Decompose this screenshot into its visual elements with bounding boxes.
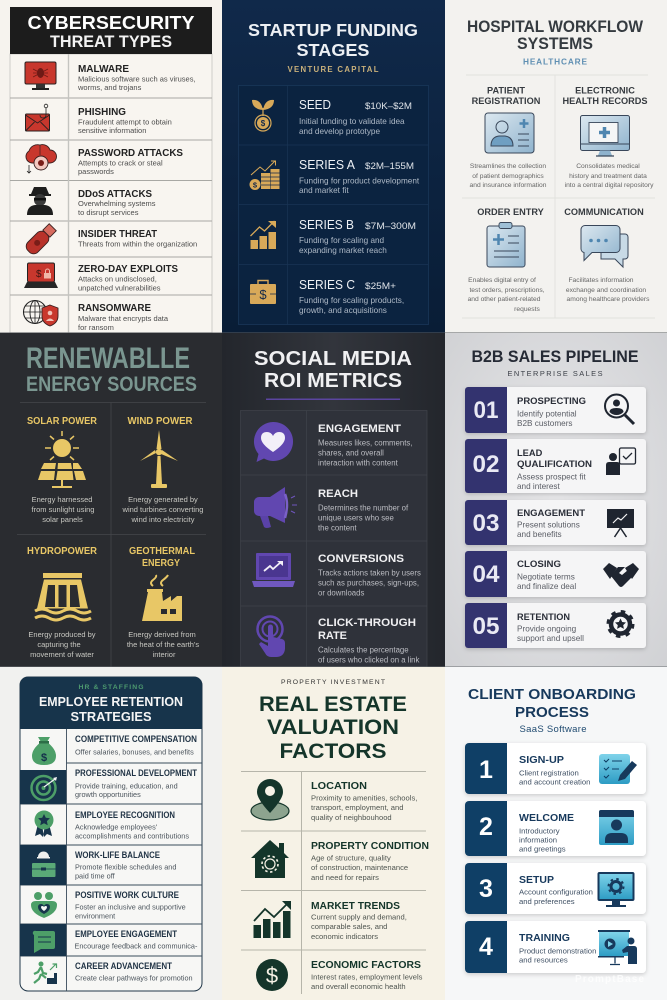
icon: map pin bbox=[251, 779, 289, 820]
row: location: transport, employment, and bbox=[311, 803, 403, 812]
row: malware: MALWARE bbox=[78, 64, 129, 75]
icon: person with checkbox bbox=[606, 448, 636, 475]
card: welcome: information bbox=[519, 836, 557, 844]
row: seed: and develop prototype bbox=[299, 127, 380, 136]
icon: message bubble bbox=[33, 931, 55, 953]
card: retention: support and upsell bbox=[517, 634, 584, 643]
icon: chat bubbles bbox=[581, 226, 628, 267]
icon: coins and arrow: $ bbox=[253, 180, 258, 190]
row: phishing bbox=[26, 104, 172, 135]
cell: electronic health records: ELECTRONIC bbox=[575, 86, 635, 96]
icon: sun and solar panel bbox=[38, 431, 86, 488]
row: employee engagement: EMPLOYEE ENGAGEMENT bbox=[75, 929, 178, 939]
card: setup bbox=[465, 863, 646, 914]
row: click-through rate bbox=[258, 616, 420, 664]
row: employee engagement bbox=[20, 924, 198, 956]
row: zero-day exploits bbox=[24, 263, 178, 292]
row: competitive compensation bbox=[32, 734, 197, 765]
row: engagement: shares, and overall bbox=[318, 448, 384, 458]
card: engagement: 03 bbox=[472, 510, 500, 537]
panel: client onboarding process bbox=[445, 667, 667, 1000]
card: retention bbox=[465, 603, 646, 648]
row: property condition bbox=[251, 840, 429, 882]
card: sign-up: Client registration bbox=[519, 768, 579, 778]
heading: renewable energy sources: RENEWABLLE bbox=[26, 342, 190, 375]
heading: hospital workflow systems: SYSTEMS bbox=[517, 35, 593, 53]
cell: patient registration: of patient demographics bbox=[472, 173, 544, 180]
row: employee recognition bbox=[34, 810, 189, 840]
row: positive work culture: POSITIVE WORK CULTURE bbox=[75, 890, 179, 900]
cell: solar power: Energy harnessed bbox=[32, 495, 92, 504]
row: series a: Funding for product development bbox=[299, 176, 420, 186]
card: sign-up: SIGN-UP bbox=[519, 755, 564, 766]
icon: handshake bbox=[603, 563, 639, 587]
row: engagement: interaction with content bbox=[318, 458, 399, 468]
row: market trends: economic indicators bbox=[311, 932, 378, 941]
row: series c: growth, and acquisitions bbox=[299, 306, 387, 315]
cell: solar power: from sunlight using bbox=[32, 505, 94, 514]
icon: money bag bbox=[32, 737, 56, 765]
row: reach: Determines the number of bbox=[318, 504, 409, 512]
icon: id card bbox=[485, 113, 534, 153]
cell: patient registration: and insurance information bbox=[470, 182, 547, 189]
panel: renewable energy sources bbox=[0, 333, 222, 667]
heading: renewable energy sources: ENERGY SOURCES bbox=[26, 373, 197, 396]
row: malware: Malicious software such as viruses, bbox=[78, 74, 196, 84]
heading: cybersecurity: THREAT TYPES bbox=[50, 33, 172, 51]
cell: hydropower: capturing the bbox=[37, 640, 81, 649]
icon: sprout coin: $ bbox=[261, 119, 266, 128]
row: malware: worms, and trojans bbox=[77, 83, 142, 92]
row: positive work culture: Foster an inclusive and supportive bbox=[75, 902, 186, 912]
row: series c bbox=[250, 278, 404, 315]
row: economic factors: ECONOMIC FACTORS bbox=[311, 960, 421, 971]
row: series c: $25M+ bbox=[365, 281, 396, 292]
icon: hooked envelope bbox=[26, 104, 50, 131]
row: click-through rate: CLICK-THROUGH bbox=[318, 617, 416, 629]
row: employee recognition: EMPLOYEE RECOGNITION bbox=[75, 810, 175, 820]
heading: b2b sales pipeline: ENTERPRISE SALES bbox=[508, 369, 603, 378]
icon: usb drive bbox=[24, 222, 58, 256]
icon: target with dart bbox=[32, 776, 57, 800]
row: series b: expanding market reach bbox=[299, 246, 387, 255]
icon: sprout coin bbox=[252, 100, 274, 131]
row: malware bbox=[25, 62, 196, 92]
row: economic factors: Interest rates, employment levels bbox=[311, 972, 423, 982]
cell: order entry: ORDER ENTRY bbox=[477, 207, 544, 217]
cell: solar power: SOLAR POWER bbox=[27, 416, 98, 427]
row: work-life balance: Promote flexible schedules and bbox=[75, 862, 176, 872]
heading: client onboarding process: CLIENT ONBOARDING bbox=[468, 686, 636, 703]
cell: communication: among healthcare providers bbox=[567, 296, 650, 303]
icon: megaphone bbox=[254, 487, 297, 528]
card: retention: Provide ongoing bbox=[517, 624, 577, 634]
row: series b bbox=[250, 218, 416, 255]
card: prospecting bbox=[465, 387, 646, 433]
heading: startup funding stages bbox=[248, 20, 418, 74]
cell: hydropower: HYDROPOWER bbox=[27, 546, 98, 557]
heading: employee retention strategies: STRATEGIES bbox=[70, 709, 152, 724]
panel: social media roi metrics bbox=[222, 333, 445, 667]
cell: order entry: requests bbox=[514, 306, 540, 313]
row: click-through rate: Calculates the percentage bbox=[318, 646, 409, 654]
panel: hospital workflow systems bbox=[445, 0, 667, 333]
row: password attacks: passwords bbox=[78, 167, 114, 176]
row: series b: SERIES B bbox=[299, 218, 354, 232]
row: employee recognition: Acknowledge employees' bbox=[75, 822, 158, 832]
panel: employee retention strategies bbox=[0, 667, 222, 1000]
icon: laptop trend bbox=[252, 553, 295, 587]
heading: cybersecurity: CYBERSECURITY bbox=[28, 12, 195, 33]
row: password attacks: PASSWORD ATTACKS bbox=[78, 148, 183, 159]
cell: geothermal energy: GEOTHERMAL bbox=[129, 546, 195, 557]
row: property condition: PROPERTY CONDITION bbox=[311, 841, 429, 852]
icon: growth bars bbox=[250, 221, 276, 249]
heading: real estate valuation factors: PROPERTY INVESTMENT bbox=[281, 679, 385, 686]
icon: laptop with lock: $ bbox=[36, 269, 42, 280]
icon: clipboard bbox=[487, 222, 525, 267]
cell: patient registration: REGISTRATION bbox=[472, 96, 541, 106]
row: career advancement bbox=[34, 961, 193, 984]
row: conversions: Tracks actions taken by users bbox=[318, 568, 421, 578]
cell: order entry: and other patient-related bbox=[468, 296, 541, 303]
row: series a: SERIES A bbox=[299, 158, 356, 172]
row: engagement: ENGAGEMENT bbox=[318, 423, 401, 435]
row: series b: Funding for scaling and bbox=[299, 236, 385, 245]
cell: communication: Facilitates information bbox=[568, 277, 634, 284]
card: prospecting: Identify potential bbox=[517, 410, 577, 418]
cell: hydropower bbox=[27, 546, 98, 659]
row: zero-day exploits: ZERO-DAY EXPLOITS bbox=[78, 264, 178, 275]
card: lead qualification: QUALIFICATION bbox=[517, 459, 592, 469]
cell: communication: exchange and coordination bbox=[566, 287, 646, 294]
cell: order entry bbox=[468, 207, 545, 313]
card: lead qualification: LEAD bbox=[517, 448, 543, 458]
icon: tapping hand bbox=[258, 616, 285, 657]
card: welcome: Introductory bbox=[519, 826, 560, 836]
row: series c: SERIES C bbox=[299, 278, 355, 292]
row: property condition: of construction, maintenance bbox=[311, 863, 408, 872]
card: lead qualification: Assess prospect fit bbox=[517, 472, 586, 482]
card: setup: Account configuration bbox=[519, 888, 593, 896]
heading: b2b sales pipeline: B2B SALES PIPELINE bbox=[472, 347, 638, 366]
row: ddos attacks: to disrupt services bbox=[78, 208, 139, 217]
row: zero-day exploits: unpatched vulnerabilities bbox=[78, 284, 161, 292]
card: setup: SETUP bbox=[519, 875, 554, 886]
row: market trends: Current supply and demand, bbox=[311, 912, 407, 922]
heading: client onboarding process bbox=[468, 686, 636, 735]
row: employee engagement: Encourage feedback and communica- bbox=[74, 942, 198, 950]
cell: patient registration bbox=[470, 86, 547, 189]
heading: social media roi metrics: ROI METRICS bbox=[264, 370, 402, 392]
cell: patient registration: PATIENT bbox=[487, 86, 525, 96]
row: engagement: Measures likes, comments, bbox=[318, 438, 412, 448]
icon: presenter screen bbox=[598, 930, 637, 964]
row: series a: $2M–155M bbox=[365, 161, 414, 172]
cell: hydropower: movement of water bbox=[30, 650, 94, 659]
row: series b: $7M–300M bbox=[365, 221, 416, 232]
row: work-life balance: WORK-LIFE BALANCE bbox=[75, 850, 160, 860]
cell: hydropower: Energy produced by bbox=[28, 630, 96, 639]
row: property condition: and need for repairs bbox=[311, 873, 379, 882]
heading: social media roi metrics bbox=[254, 348, 412, 400]
heading: real estate valuation factors: REAL ESTATE bbox=[259, 693, 407, 716]
row: ddos attacks: Overwhelming systems bbox=[78, 199, 156, 208]
heading: client onboarding process: PROCESS bbox=[515, 704, 589, 721]
icon: laptop with lock bbox=[24, 263, 58, 288]
icon: presentation board bbox=[607, 509, 634, 537]
card: prospecting: 01 bbox=[474, 397, 498, 424]
card: closing: 04 bbox=[472, 561, 500, 588]
row: conversions bbox=[252, 553, 421, 598]
card: training bbox=[465, 921, 646, 973]
card: training: and resources bbox=[519, 956, 568, 964]
cell: order entry: Enables digital entry of bbox=[468, 277, 536, 284]
icon: dollar coin bbox=[256, 959, 288, 991]
row: location: LOCATION bbox=[311, 781, 367, 792]
row: insider threat: INSIDER THREAT bbox=[78, 229, 157, 240]
heading: hospital workflow systems: HOSPITAL WORKFLOW bbox=[467, 18, 644, 36]
row: password attacks: Attempts to crack or steal bbox=[78, 158, 163, 168]
icon: geothermal plant bbox=[142, 575, 182, 621]
icon: checklist and pencil bbox=[599, 754, 637, 784]
card: lead qualification: 02 bbox=[472, 451, 500, 478]
row: engagement bbox=[254, 422, 412, 468]
card: closing: and finalize deal bbox=[517, 582, 576, 591]
heading: hospital workflow systems: HEALTHCARE bbox=[523, 56, 587, 66]
cell: communication bbox=[564, 207, 650, 303]
card: training: Product demonstration bbox=[519, 946, 596, 956]
icon: hydro dam bbox=[35, 573, 91, 620]
card: lead qualification: and interest bbox=[517, 482, 561, 491]
card: sign-up: and account creation bbox=[519, 778, 590, 786]
row: phishing: PHISHING bbox=[78, 107, 126, 118]
row: positive work culture bbox=[31, 890, 186, 920]
cell: wind power: wind into electricity bbox=[131, 515, 195, 524]
icon: hooded spy bbox=[27, 187, 53, 215]
icon: infected monitor bbox=[25, 62, 56, 90]
icon: cloud with eye bbox=[26, 145, 57, 173]
row: location bbox=[251, 779, 417, 822]
cell: patient registration: Streamlines the collection bbox=[470, 163, 546, 170]
cell: wind power: WIND POWER bbox=[128, 416, 193, 427]
heading: real estate valuation factors: FACTORS bbox=[280, 740, 386, 763]
heading: employee retention strategies: HR & STAFFING bbox=[78, 684, 144, 691]
card: engagement: Present solutions bbox=[517, 520, 580, 530]
heading: renewable energy sources bbox=[26, 342, 197, 396]
heading: b2b sales pipeline bbox=[472, 347, 638, 378]
icon: runner on stairs bbox=[34, 962, 57, 984]
card: retention: RETENTION bbox=[517, 612, 570, 622]
icon: coins and arrow bbox=[250, 161, 280, 190]
card: welcome: and greetings bbox=[519, 844, 566, 854]
card: prospecting: B2B customers bbox=[517, 419, 573, 428]
row: competitive compensation: COMPETITIVE COMPENSATION bbox=[75, 734, 197, 744]
icon: house with gear bbox=[251, 840, 289, 878]
cell: communication: COMMUNICATION bbox=[564, 207, 644, 217]
row: ddos attacks: DDoS ATTACKS bbox=[78, 189, 152, 200]
card: closing: Negotiate terms bbox=[517, 572, 575, 582]
row: series c: Funding for scaling products, bbox=[299, 296, 404, 305]
heading: employee retention strategies: EMPLOYEE RETENTION bbox=[39, 694, 183, 709]
icon: gear with star bbox=[608, 612, 633, 636]
row: work-life balance: paid time off bbox=[75, 872, 116, 880]
icon: dollar briefcase bbox=[250, 280, 276, 304]
icon: dollar briefcase: $ bbox=[259, 287, 267, 302]
icon: dollar coin: $ bbox=[266, 963, 278, 988]
card: setup: and preferences bbox=[519, 897, 575, 906]
icon: magnifier person bbox=[605, 394, 634, 424]
row: positive work culture: environment bbox=[75, 912, 115, 920]
row: economic factors bbox=[256, 959, 423, 991]
row: market trends: MARKET TRENDS bbox=[311, 901, 400, 912]
card: engagement: ENGAGEMENT bbox=[517, 508, 585, 518]
cell: wind power: Energy generated by bbox=[128, 495, 198, 504]
cell: electronic health records: into a central digital repository bbox=[565, 182, 654, 189]
row: conversions: such as purchases, sign-ups, bbox=[318, 578, 419, 588]
card: training: 4 bbox=[479, 933, 493, 961]
cell: geothermal energy: interior bbox=[153, 650, 176, 659]
row: conversions: or downloads bbox=[318, 588, 364, 598]
row: work-life balance bbox=[20, 845, 176, 885]
cell: wind power: wind turbines converting bbox=[122, 505, 203, 514]
row: ddos attacks bbox=[27, 187, 156, 217]
row: location: Proximity to amenities, schools, bbox=[311, 794, 417, 802]
panel: cybersecurity threat types bbox=[0, 0, 222, 333]
card: welcome: WELCOME bbox=[519, 813, 574, 824]
card: setup: 3 bbox=[479, 875, 493, 903]
cell: geothermal energy: ENERGY bbox=[142, 558, 180, 569]
row: seed: Initial funding to validate idea bbox=[299, 117, 405, 126]
row: economic factors: and overall economic health bbox=[311, 982, 406, 991]
row: click-through rate: RATE bbox=[318, 630, 347, 642]
icon: award ribbon bbox=[34, 810, 54, 837]
row: career advancement: Create clear pathways for promotion bbox=[75, 974, 193, 982]
icon: wind turbine bbox=[140, 430, 178, 488]
row: password attacks bbox=[26, 145, 183, 176]
cell: order entry: test orders, prescriptions, bbox=[469, 287, 545, 294]
heading: real estate valuation factors: VALUATION bbox=[267, 716, 399, 739]
icon: monitor gear bbox=[598, 873, 634, 907]
row: professional development: PROFESSIONAL DEVELOPMENT bbox=[75, 768, 198, 778]
row: reach: REACH bbox=[318, 488, 358, 500]
row: phishing: sensitive information bbox=[78, 126, 146, 135]
card: engagement bbox=[465, 500, 646, 545]
row: series a bbox=[250, 158, 420, 195]
icon: globe and shield bbox=[24, 300, 58, 326]
cell: electronic health records: HEALTH RECORDS bbox=[562, 96, 648, 106]
cell: solar power: solar panels bbox=[42, 515, 83, 524]
heading: hospital workflow systems bbox=[467, 18, 644, 66]
heading: startup funding stages: STAGES bbox=[296, 40, 370, 60]
row: ransomware bbox=[24, 300, 169, 332]
icon: bars and arrow bbox=[254, 901, 291, 938]
cell: geothermal energy: Energy derived from bbox=[128, 630, 196, 639]
card: closing bbox=[465, 551, 646, 597]
row: seed bbox=[252, 98, 412, 136]
icon: clock and briefcase bbox=[32, 852, 56, 877]
card: welcome bbox=[465, 801, 646, 856]
row: insider threat: Threats from within the organization bbox=[78, 240, 197, 248]
row: series a: and market fit bbox=[299, 186, 349, 195]
card: prospecting: PROSPECTING bbox=[517, 396, 586, 406]
row: market trends: comparable sales, and bbox=[311, 922, 387, 931]
row: ransomware: Malware that encrypts data bbox=[78, 314, 169, 323]
icon: money bag: $ bbox=[41, 752, 47, 764]
row: competitive compensation: Offer salaries, bonuses, and benefits bbox=[75, 748, 194, 756]
icon: monitor with cross bbox=[580, 116, 630, 156]
card: closing: CLOSING bbox=[517, 559, 561, 569]
heading: startup funding stages: STARTUP FUNDING bbox=[248, 20, 418, 40]
icon: browser user bbox=[599, 810, 634, 845]
row: market trends bbox=[254, 901, 407, 941]
heading: client onboarding process: SaaS Software bbox=[520, 724, 586, 735]
heading: startup funding stages: VENTURE CAPITAL bbox=[288, 65, 379, 74]
card: engagement: and benefits bbox=[517, 530, 562, 539]
heading: social media roi metrics: SOCIAL MEDIA bbox=[254, 348, 412, 370]
row: ransomware: for ransom bbox=[78, 323, 114, 332]
card: sign-up: 1 bbox=[479, 756, 493, 784]
row: professional development: Provide training, education, and bbox=[75, 782, 178, 790]
cell: wind power bbox=[122, 416, 203, 524]
row: seed: SEED bbox=[299, 98, 331, 112]
panel: startup funding stages bbox=[222, 0, 445, 333]
row: ransomware: RANSOMWARE bbox=[78, 303, 151, 314]
row: zero-day exploits: Attacks on undisclosed, bbox=[78, 274, 157, 284]
cell: solar power bbox=[27, 416, 98, 524]
row: employee recognition: accomplishments and contributions bbox=[75, 832, 189, 840]
row: click-through rate: of users who clicked on a link bbox=[318, 656, 420, 664]
row: property condition: Age of structure, quality bbox=[311, 854, 391, 862]
row: professional development bbox=[20, 768, 198, 804]
row: seed: $10K–$2M bbox=[365, 101, 412, 112]
heading: cybersecurity bbox=[10, 7, 212, 54]
watermark: PromptBase bbox=[575, 974, 644, 985]
card: retention: 05 bbox=[472, 613, 500, 640]
row: location: quality of neighbouhood bbox=[311, 813, 392, 822]
card: lead qualification bbox=[465, 439, 646, 493]
heading: employee retention strategies bbox=[20, 677, 202, 729]
icon: people and heart bbox=[31, 892, 57, 918]
row: conversions: CONVERSIONS bbox=[318, 553, 404, 565]
row: reach: the content bbox=[318, 524, 357, 532]
icon: heart speech bubble bbox=[254, 422, 293, 462]
cell: electronic health records bbox=[562, 86, 654, 189]
row: insider threat bbox=[24, 222, 197, 256]
cell: electronic health records: history and treatment data bbox=[569, 173, 647, 180]
panel: real estate valuation factors bbox=[222, 667, 445, 1000]
heading: real estate valuation factors bbox=[259, 679, 407, 763]
card: sign-up bbox=[465, 743, 646, 794]
card: welcome: 2 bbox=[479, 813, 493, 841]
row: reach bbox=[254, 487, 409, 532]
cell: geothermal energy: the heat of the earth's bbox=[127, 640, 199, 649]
card: training: TRAINING bbox=[519, 933, 570, 944]
cell: electronic health records: Consolidates medical bbox=[576, 163, 640, 170]
row: professional development: growth opportunities bbox=[75, 790, 141, 799]
row: reach: unique users who see bbox=[318, 514, 394, 522]
panel: b2b sales pipeline bbox=[445, 333, 667, 667]
cell: geothermal energy bbox=[127, 546, 199, 659]
row: phishing: Fraudulent attempt to obtain bbox=[78, 118, 172, 126]
row: career advancement: CAREER ADVANCEMENT bbox=[75, 961, 173, 971]
